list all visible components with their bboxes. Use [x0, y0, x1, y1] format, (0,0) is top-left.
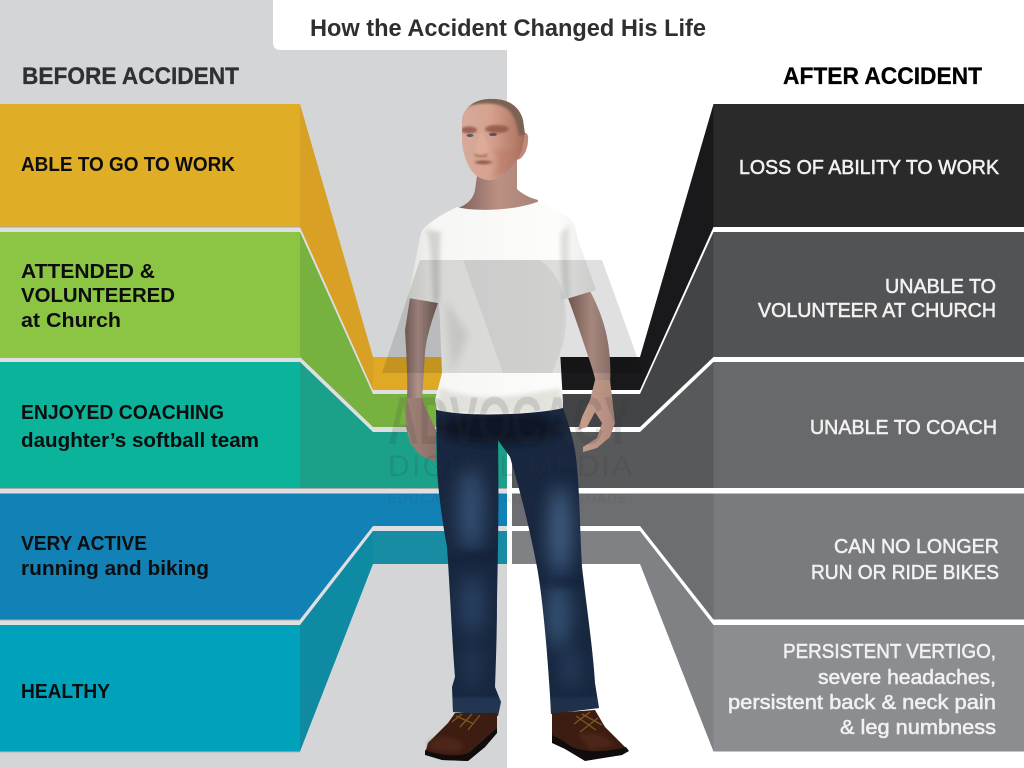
left arm	[405, 298, 438, 462]
heading: before accident: BEFORE ACCIDENT	[22, 63, 239, 90]
head	[461, 97, 528, 180]
eyes	[466, 134, 474, 137]
band: very active	[0, 494, 507, 620]
band: attended and volunteered: VOLUNTEERED	[21, 285, 175, 307]
band: unable to coach	[512, 362, 1024, 488]
heading: after accident: AFTER ACCIDENT	[783, 63, 982, 90]
label: ATTENDED &	[21, 261, 155, 283]
label: CAN NO LONGER	[834, 536, 999, 558]
band: unable to volunteer: VOLUNTEER AT CHURCH	[758, 300, 996, 322]
nose	[481, 136, 486, 153]
hair	[464, 97, 526, 136]
band: persistent vertigo: & leg numbness	[840, 717, 996, 739]
label: HEALTHY	[21, 681, 111, 703]
label: UNABLE TO	[885, 276, 996, 298]
band: enjoyed coaching	[0, 362, 507, 488]
logo triangle	[382, 260, 643, 373]
brow shade	[461, 126, 477, 134]
watermark: advocacy digital media logo	[382, 260, 643, 506]
band: persistent vertigo: persistent back & neck pain	[728, 692, 996, 714]
label: ENJOYED COACHING	[21, 402, 224, 424]
laces	[574, 712, 602, 732]
band: persistent vertigo: severe headaches,	[818, 667, 996, 689]
band: can no longer run: RUN OR RIDE BIKES	[811, 562, 999, 584]
label: LOSS OF ABILITY TO WORK	[739, 157, 1000, 179]
tagline: EDUCATE. ENGAGE. PERSUADE.	[388, 491, 632, 506]
label: ABLE TO GO TO WORK	[21, 154, 236, 176]
cheek shade	[494, 150, 510, 176]
jeans	[436, 408, 600, 717]
band: healthy	[0, 531, 507, 752]
band: attended and volunteered	[0, 232, 507, 427]
right boot	[552, 710, 629, 761]
title tab	[273, 0, 1024, 50]
background: grey left half	[0, 0, 507, 768]
left boot	[425, 713, 497, 761]
illustration: standing man	[405, 97, 629, 761]
ear	[518, 133, 528, 160]
label: PERSISTENT VERTIGO,	[783, 641, 996, 663]
label: UNABLE TO COACH	[810, 417, 997, 439]
band: attended and volunteered: at Church	[21, 310, 121, 332]
wordmark: ADVOCACY	[388, 383, 632, 459]
sub-wordmark: DIGITAL MEDIA	[388, 450, 632, 483]
title: How the Accident Changed His Life	[310, 15, 706, 42]
band: unable to volunteer	[512, 232, 1024, 427]
band: able to go to work	[0, 104, 507, 390]
laces	[452, 714, 480, 730]
panel: before accident bands	[0, 104, 507, 752]
neck	[458, 160, 538, 211]
separators behind the left bands	[0, 226, 507, 625]
right hand	[578, 380, 615, 452]
mouth	[474, 160, 493, 164]
band: persistent vertigo	[512, 531, 1024, 752]
band: enjoyed coaching: daughter’s softball team	[21, 430, 259, 452]
right arm	[568, 291, 615, 452]
left hand	[405, 398, 436, 462]
band: can no longer run	[512, 494, 1024, 620]
band: very active: running and biking	[21, 558, 209, 580]
band: loss of ability to work	[512, 104, 1024, 390]
panel: after accident bands	[512, 104, 1024, 752]
label: VERY ACTIVE	[21, 533, 147, 555]
t-shirt	[408, 202, 596, 414]
